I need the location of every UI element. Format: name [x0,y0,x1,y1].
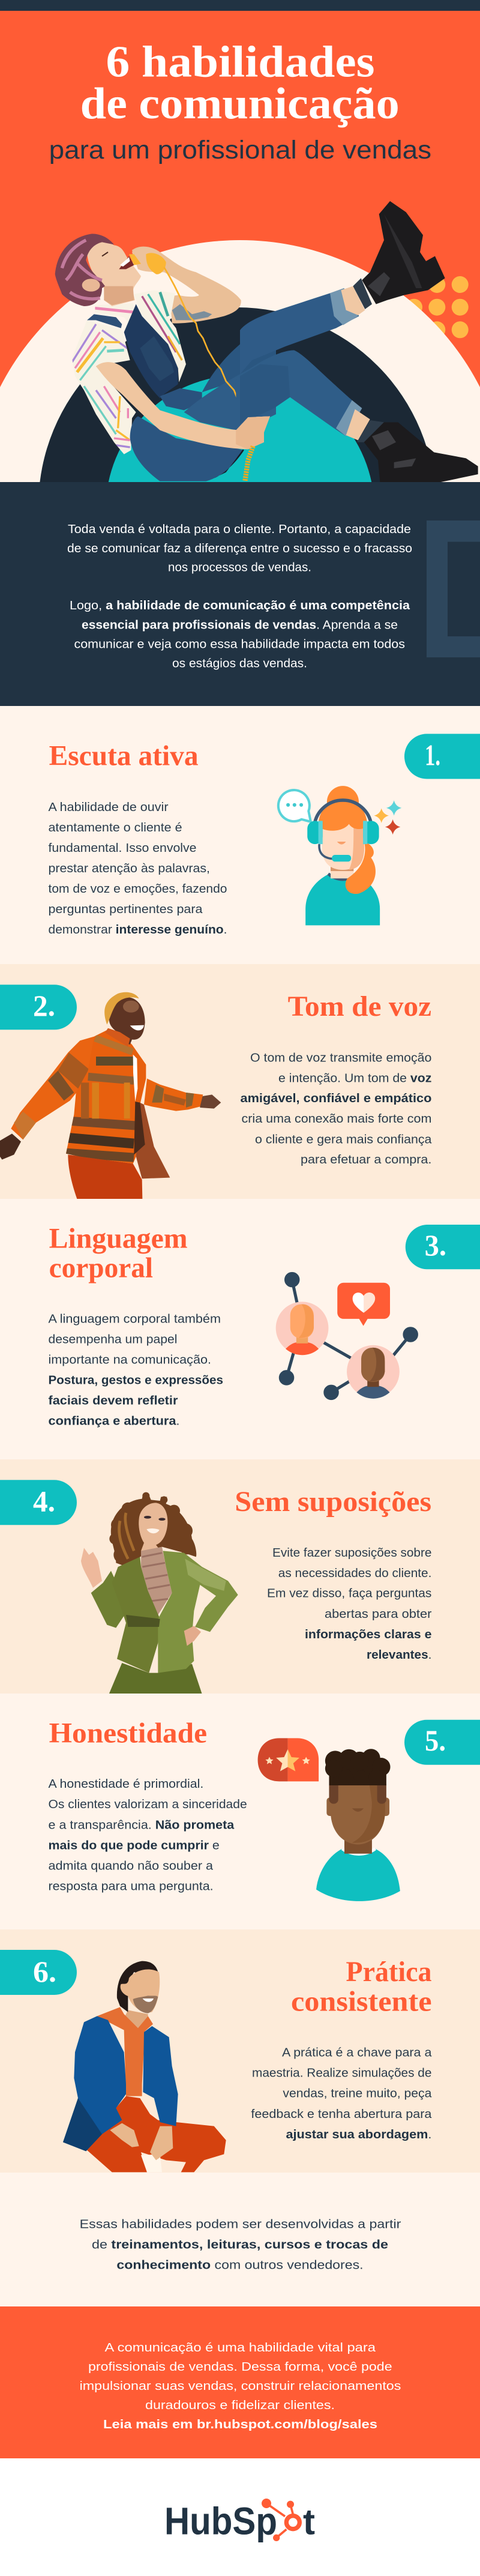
body text: abertas para obter [325,1607,432,1621]
denim overalls [124,304,178,398]
conclusion text: impulsionar suas vendas, construir relacionamentos [80,2379,401,2393]
body text: para efetuar a compra. [301,1153,431,1166]
blazer right [158,1551,238,1673]
eyes and mouth [144,1516,151,1519]
body text: fundamental. Isso envolve [48,841,197,855]
jacket body [66,1030,146,1163]
beanie [104,992,139,1025]
neck [124,2010,148,2029]
panel: 5 Honestidade [0,1694,480,1929]
ankles [341,286,365,315]
number pill [406,1225,480,1269]
body text [48,1312,223,1428]
panel: 6 Prática consistente [0,1929,480,2173]
beard and smile [133,1995,158,2013]
body text: A linguagem corporal também [48,1312,221,1326]
zebra top [141,1547,172,1615]
socks [353,278,372,309]
conclusion text [80,2341,401,2431]
jacket tail [136,1100,170,1178]
smile [130,1025,144,1030]
body text: ajustar sua abordagem . [286,2128,431,2141]
number pill: 6. [33,1955,56,1988]
leg behind [202,345,276,393]
number pill: 3. [425,1228,446,1262]
plaid bands [66,1035,136,1162]
number pill [404,734,480,779]
boot raised [362,201,445,304]
body text: cria uma conexão mais forte com [241,1112,431,1126]
panel: 2 Tom de voz [0,964,480,1199]
body text: perguntas pertinentes para [48,902,203,916]
forearm lower [96,362,270,449]
head [109,998,145,1045]
skirt [109,1663,202,1694]
logo: HubSpot: t [303,2502,315,2542]
photo: man in blue blazer [63,1961,226,2172]
intro paragraph 1 [67,522,412,574]
subtitle: para um profissional de vendas [49,136,431,164]
hand [236,416,270,449]
top navy bar [0,0,480,11]
intro paragraph 2 [70,599,410,671]
heading: Tom de voz [288,991,431,1022]
left sleeve [11,1037,99,1139]
number pill: 2. [33,989,55,1022]
phone cord [163,267,236,397]
body text [48,800,227,937]
photo: woman on the phone with boots [55,201,478,482]
heading: Escuta ativa [49,740,199,772]
right sleeve [144,1079,203,1111]
body text: e a transparência. Não prometa [48,1818,235,1832]
number pill [0,1480,77,1525]
intro paragraph 2: comunicar e veja como essa habilidade impacta em todos [74,638,405,651]
face [121,1970,160,2012]
note text: conhecimento com outros vendedores. [116,2258,364,2272]
network lines and nodes [280,1273,416,1399]
body text [267,1546,432,1662]
jeans hip [130,416,244,481]
blazer left [63,2016,126,2151]
body text: relevantes. [367,1648,431,1662]
rating bubble [258,1738,319,1781]
agent figure [305,786,380,925]
striped shirt [70,288,190,458]
upper leg [240,288,359,351]
ear [82,279,100,292]
note text: de treinamentos, leituras, cursos e trocas de [92,2238,388,2252]
left arm [91,1571,126,1628]
panel: 1 Escuta ativa [0,706,480,964]
heading: Linguagem [49,1223,188,1255]
heading: Sem suposições [235,1486,431,1518]
panel: skills development note [0,2173,480,2306]
blazer right [143,2026,178,2126]
body text: amigável, confiável e empático [240,1091,431,1105]
number pill: 5. [425,1724,446,1757]
heading: consistente [291,1986,432,2018]
logo: HubSpot: HubSp [164,2500,277,2543]
body text: prestar atenção às palavras, [48,861,210,875]
conclusion text: profissionais de vendas. Dessa forma, você pode [88,2360,392,2374]
icon: headset agent [278,786,401,925]
body text: mais do que pode cumprir e [48,1839,220,1853]
number pill [0,985,77,1030]
number pill: 4. [33,1484,55,1518]
intro paragraph 2: essencial para profissionais de vendas . Aprenda a se [82,618,398,632]
panel: hero [0,0,480,482]
body text: o cliente e gera mais confiança [255,1133,432,1147]
icon: yellow dot grid [406,276,469,338]
hands [81,1548,102,1588]
intro paragraph 1: nos processos de vendas. [168,561,311,574]
conclusion text: A comunicação é uma habilidade vital para [104,2341,376,2354]
icon: person with star rating bubble [258,1738,400,1901]
face and neck [139,1503,167,1553]
body text: atentamente o cliente é [48,821,182,834]
title: 6 habilidades [106,37,374,86]
body text: resposta para uma pergunta. [48,1879,214,1893]
front thigh [184,379,276,430]
heart bubble [337,1283,390,1326]
body text: O tom de voz transmite emoção [250,1051,431,1064]
body text: importante na comunicação. [48,1353,211,1366]
navy arc [40,307,426,482]
hoodie [97,2007,153,2096]
number pill [0,1950,77,1995]
body text: informações claras e [305,1627,431,1641]
photo: man in plaid jacket [0,992,221,1199]
cuffs [330,288,358,325]
title: de comunicação [80,79,400,128]
panel: footer [0,2458,480,2576]
hair [109,1492,196,1569]
note text: Essas habilidades podem ser desenvolvidas a partir [80,2218,401,2231]
body text [251,2046,432,2141]
body text: A prática é a chave para a [282,2046,432,2059]
intro paragraph 2: os estágios das vendas. [172,657,307,671]
heading: corporal [49,1252,153,1283]
body text: vendas, treine muito, peça [283,2087,432,2101]
panel: 4 Sem suposições [0,1459,480,1694]
body text: desempenha um papel [48,1333,177,1347]
lower leg [236,350,362,436]
collar [105,1028,130,1046]
cream arc [0,240,480,482]
body text: Evite fazer suposições sobre [272,1546,431,1560]
body text: Os clientes valorizam a sinceridade [48,1797,247,1811]
stool [141,2154,162,2172]
hair [117,1961,159,2012]
arm raised [132,247,241,324]
number pill [404,1720,480,1765]
closed eye and mouth [102,252,108,256]
intro paragraph 1: de se comunicar faz a diferença entre o sucesso e o fracasso [67,541,412,555]
intro paragraph 2: Logo, a habilidade de comunicação é uma competência [70,599,410,612]
speech bubble [278,790,311,822]
photo: woman in green blazer [81,1492,238,1694]
heading: Honestidade [49,1717,207,1749]
person [316,1749,400,1901]
hand and phone [132,249,164,273]
body text: faciais devem refletir [48,1393,178,1407]
hair [55,234,114,306]
body text: Postura, gestos e expressões [48,1374,223,1387]
pants [87,2096,226,2172]
sparkles [374,800,401,834]
number pill: 1. [425,738,440,772]
panel: conclusion [0,2306,480,2458]
body text: tom de voz e emoções, fazendo [48,882,227,896]
body text: A honestidade é primordial. [48,1777,203,1791]
body text: feedback e tenha abertura para [251,2107,432,2121]
person two [347,1345,400,1399]
panel: 3 Linguagem corporal [0,1199,480,1459]
neck and face [87,242,141,306]
body text: A habilidade de ouvir [48,800,169,814]
body text: admita quando não souber a [48,1859,214,1872]
body text: confiança e abertura . [48,1414,180,1428]
teal arc [108,378,372,482]
conclusion text: Leia mais em br.hubspot.com/blog/sales [103,2418,377,2431]
boot lower [364,422,478,482]
body text [240,1051,432,1166]
body text: maestria. Realize simulações de [252,2066,431,2080]
body text [48,1777,247,1893]
blazer left [112,1557,160,1673]
intro paragraph 1: Toda venda é voltada para o cliente. Portanto, a capacidade [68,522,411,536]
conclusion text: duradouros e fidelizar clientes. [145,2398,335,2412]
person one [276,1302,328,1355]
hands [110,2123,139,2147]
body text: demonstrar interesse genuíno. [48,923,227,937]
icon: connected people [276,1273,416,1399]
pants [68,1154,142,1199]
shirt and inner [133,1055,137,1102]
panel: introduction [0,482,480,706]
heading: Prática [346,1956,432,1988]
note text [80,2218,401,2272]
body text: as necessidades do cliente. [278,1566,431,1580]
body text: e intenção. Um tom de voz [278,1071,431,1085]
hands [0,1133,21,1160]
decorative outlined square [427,520,480,657]
body text: Em vez disso, faça perguntas [267,1587,431,1600]
